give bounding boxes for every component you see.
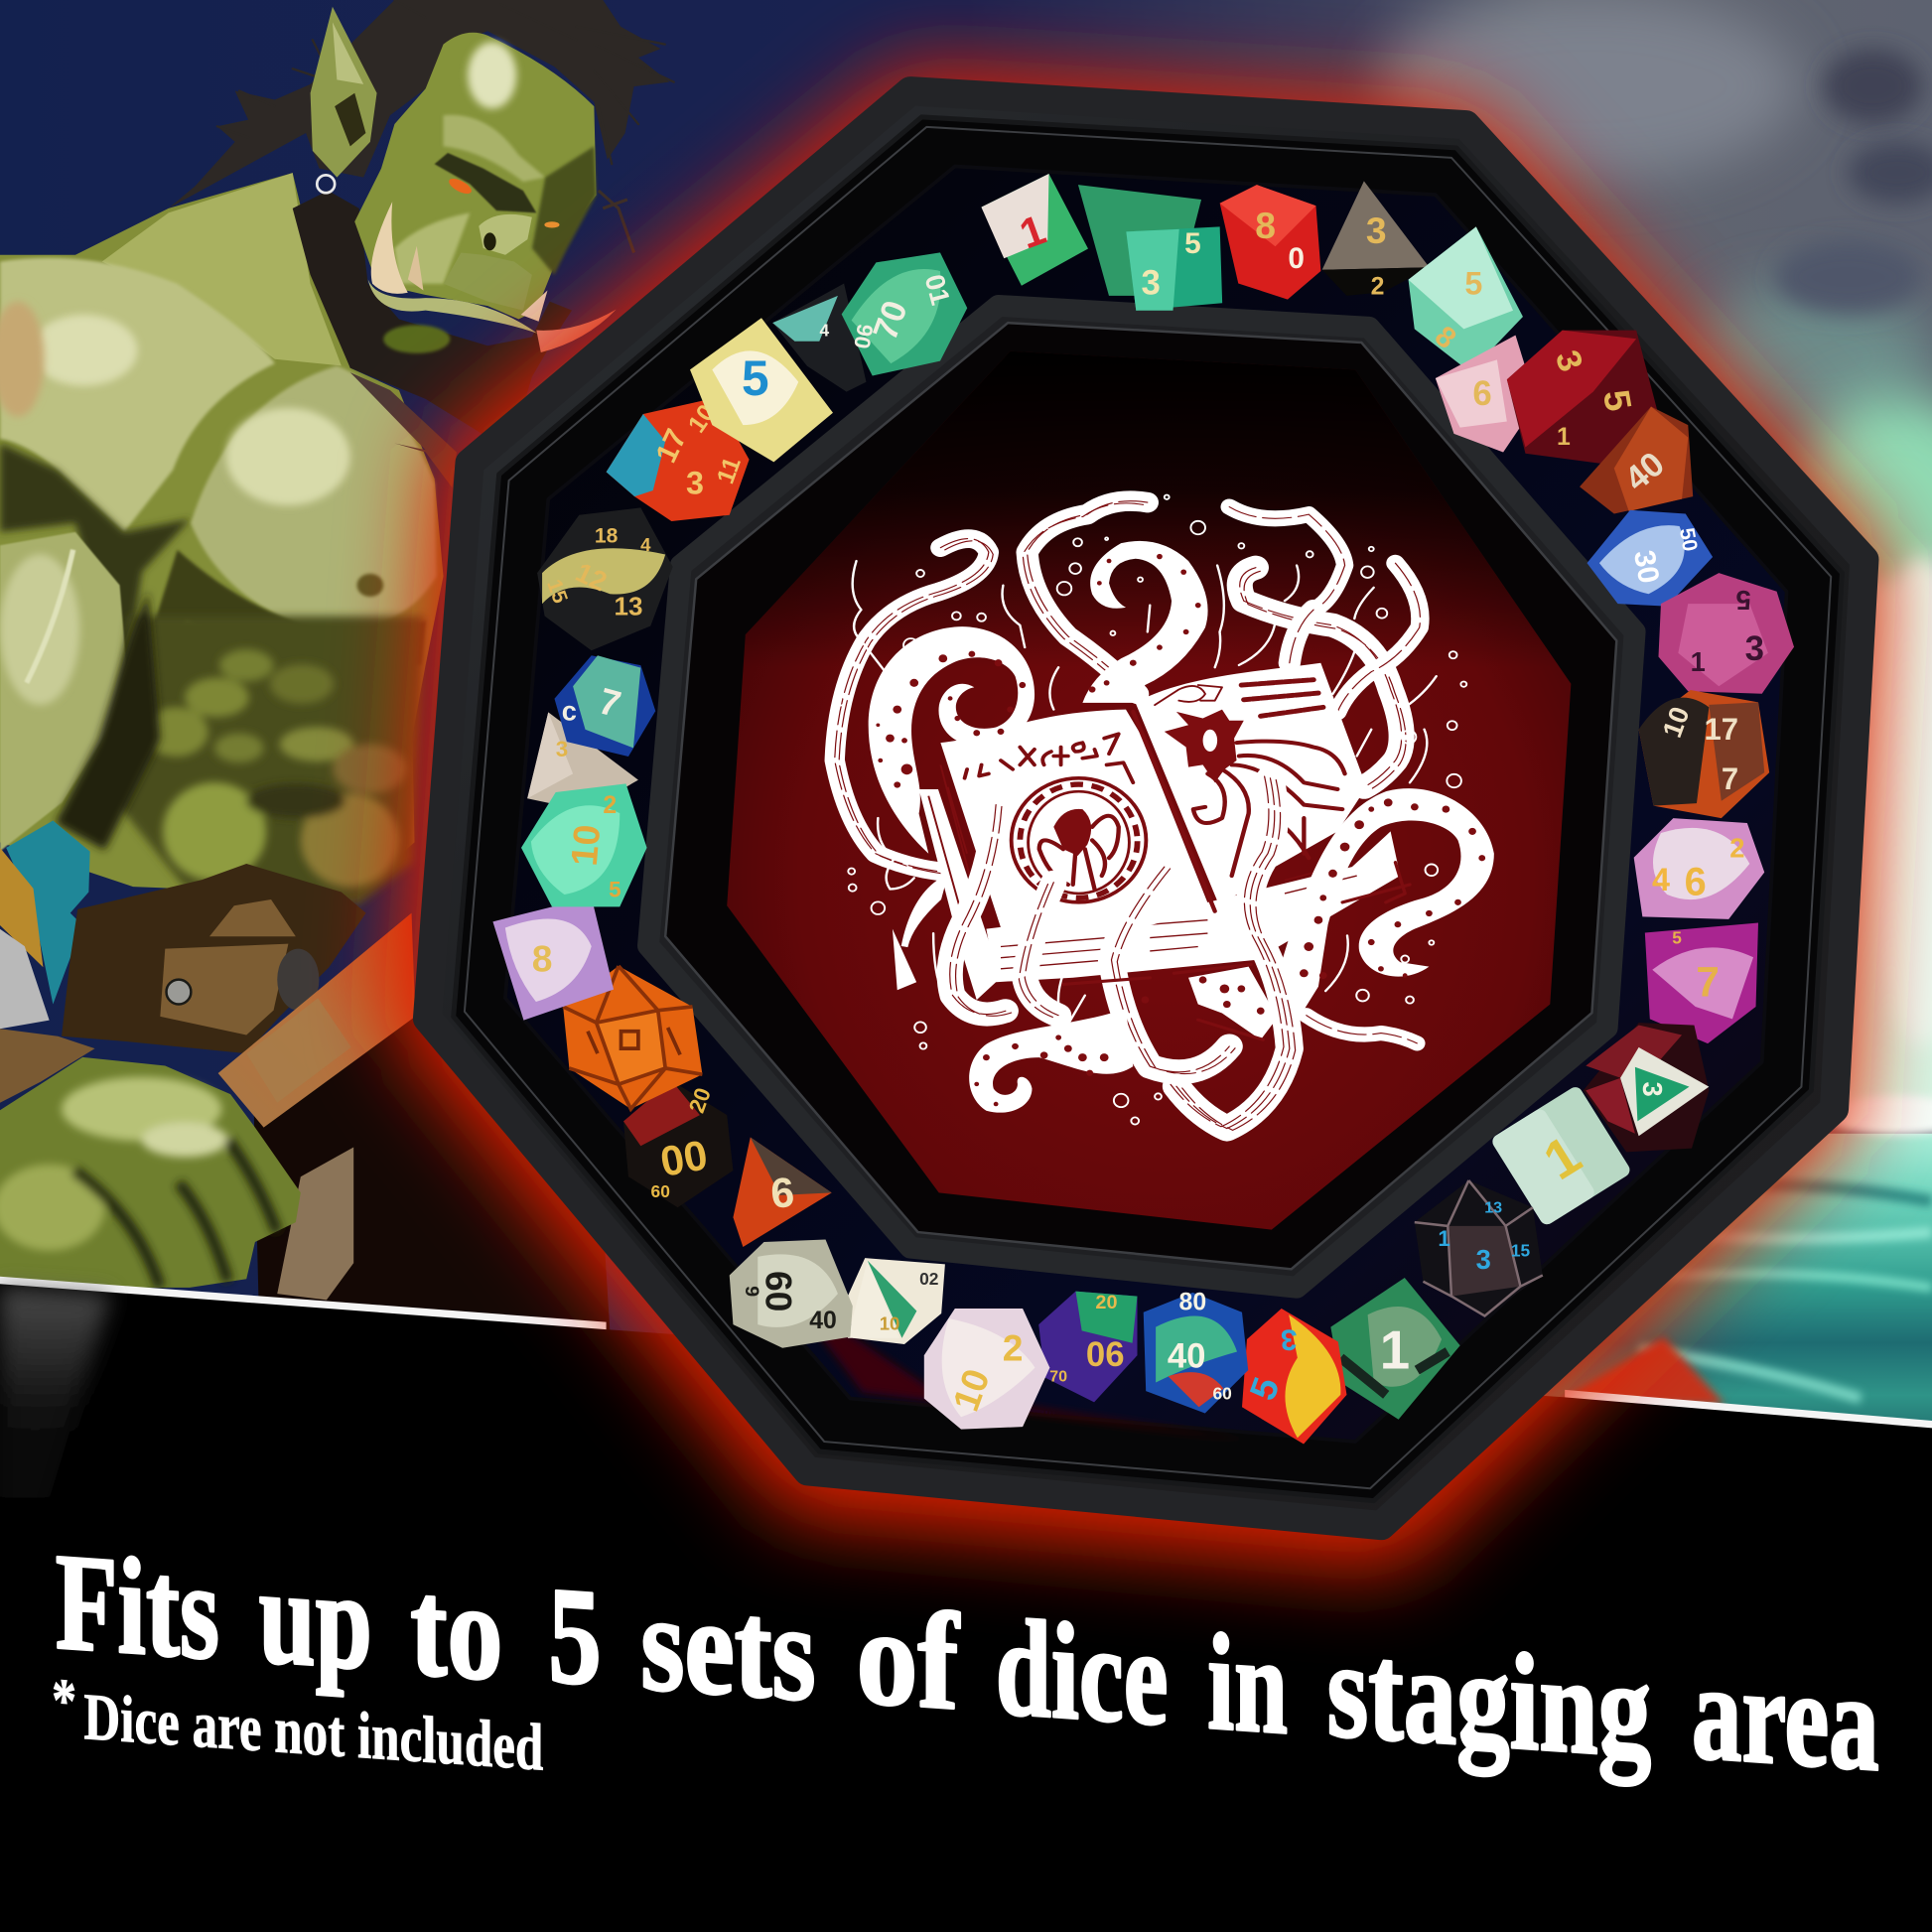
die: pale mint d6 xyxy=(1490,1084,1632,1227)
die: grey d4: 2 xyxy=(1371,274,1384,301)
orc: nipple xyxy=(356,574,383,597)
die: pink: 6 xyxy=(1472,375,1492,413)
tentacle top centre xyxy=(1082,541,1208,703)
die: small white green d4: 10 xyxy=(880,1312,899,1333)
orc: beard xyxy=(293,191,572,435)
die: red yellow: 3 xyxy=(1281,1323,1297,1356)
orc: upper arm xyxy=(0,532,128,851)
die: red d8: 0 xyxy=(1288,242,1305,275)
die: purple white d6 xyxy=(492,897,614,1021)
sea xyxy=(1540,1134,1932,1442)
orc: small tusk xyxy=(408,246,423,290)
black lower band xyxy=(0,1284,1932,1932)
orc: arm highlight xyxy=(0,554,79,705)
book page lines xyxy=(1001,863,1357,969)
headline: dice xyxy=(996,1590,1169,1755)
die: purple xyxy=(1038,1292,1138,1402)
die: black yellow d20: 15 xyxy=(542,577,572,607)
orc: chest strap xyxy=(350,372,457,487)
die: teal black xyxy=(772,283,866,392)
die: red black d4 xyxy=(733,1138,832,1247)
orc: belt upper panel xyxy=(209,899,296,936)
orc: inner ear xyxy=(335,93,365,146)
die: black yellow d20: 4 xyxy=(640,534,651,555)
orc: silver blade xyxy=(0,929,50,1029)
die: black blue: 1 xyxy=(1438,1226,1450,1251)
die: orange blue d20: 17 xyxy=(649,424,693,468)
headline: to xyxy=(410,1552,502,1711)
orc: shoulder shadow xyxy=(0,444,191,692)
orc: muzzle xyxy=(444,253,532,311)
die: orange dark xyxy=(1639,690,1769,818)
die: blue white: 30 xyxy=(1627,548,1665,586)
tentacle and book artwork xyxy=(835,494,1494,1130)
die: blue green swirl: 60 xyxy=(1212,1384,1232,1404)
orc: shoulder highlight xyxy=(31,315,137,385)
die: pale grey d10 xyxy=(730,1240,853,1348)
sigil ring glyphs xyxy=(1020,784,1138,897)
die: green d10: 70 xyxy=(867,296,915,345)
die: dark red black: 20 xyxy=(684,1084,716,1116)
orc: body silhouette xyxy=(0,173,444,896)
die: mint teal d10: 10 xyxy=(563,823,608,868)
orc: gold blade xyxy=(0,848,43,967)
die: purple: 20 xyxy=(1095,1292,1118,1313)
die: blue green d4: c xyxy=(562,696,577,727)
die: mint teal d10: 2 xyxy=(603,792,617,819)
orc: chin xyxy=(383,325,450,353)
inner tower outer wall xyxy=(648,306,1635,1288)
die: pale grey d10: 40 xyxy=(809,1308,837,1334)
die: black yellow d20: 13 xyxy=(614,592,642,621)
die: yellow white d6 xyxy=(690,318,833,462)
die: orange blue d20 xyxy=(607,398,750,521)
creature tendrils xyxy=(1193,742,1345,876)
die: blue green d4: 7 xyxy=(595,679,625,725)
die: blue green d4 xyxy=(554,655,655,757)
kelp ribbons behind book xyxy=(835,501,1420,1043)
orc: dark gap beside arm xyxy=(56,592,160,850)
orc: pink strap behind jaw xyxy=(536,310,617,352)
orc: hair strands xyxy=(217,0,674,164)
die: red yellow xyxy=(1241,1309,1346,1445)
cthulhu tentacles xyxy=(1039,816,1119,889)
white slanted divider lines xyxy=(0,1277,1932,1430)
velvet sliver lower staging area xyxy=(788,1294,1257,1442)
die: pink white d10: 2 xyxy=(1729,832,1745,863)
orc: eye socket xyxy=(435,153,536,212)
orc: lower tusk xyxy=(521,290,547,322)
die: pink xyxy=(1436,336,1537,452)
tray outer wall xyxy=(428,91,1864,1526)
die: red d8 xyxy=(1220,185,1320,300)
die: green white d8: 1 xyxy=(1014,206,1051,257)
book right page xyxy=(1136,663,1366,906)
die: green d6: 1 xyxy=(1380,1320,1410,1381)
background: navy sky and storm xyxy=(0,0,1932,1442)
orc: axe handle xyxy=(218,913,415,1128)
book left page xyxy=(940,710,1210,942)
headline: in xyxy=(1207,1605,1288,1763)
orc: pectoral highlight xyxy=(226,408,350,505)
orc: face xyxy=(354,33,597,320)
horizon glow xyxy=(1824,1095,1932,1135)
die: magenta d8: 7 xyxy=(1696,959,1720,1006)
die: magenta d12: 1 xyxy=(1691,646,1706,677)
die: mint teal d10: 5 xyxy=(609,878,621,902)
die: mint d10: 8 xyxy=(1429,320,1462,355)
orc: lower dark area xyxy=(252,1011,610,1330)
orc: abdomen xyxy=(104,617,425,905)
orc: big tusk xyxy=(371,202,408,294)
orc: belt stud xyxy=(167,980,191,1004)
die: blue white: 50 xyxy=(1675,526,1702,553)
headline xyxy=(56,1525,1879,1801)
die: magenta d12: 3 xyxy=(1745,630,1764,668)
die: orange dark: 7 xyxy=(1722,761,1738,796)
orc: shoulder deltoid xyxy=(0,258,275,532)
tentacle right big xyxy=(1283,788,1494,1018)
die: white pink d10: 2 xyxy=(1003,1327,1024,1369)
orc: cheek xyxy=(394,212,470,284)
orc: neck and trapezius xyxy=(102,173,342,365)
dice tray xyxy=(428,91,1864,1526)
die: black yellow d20: 18 xyxy=(595,524,619,547)
die: mint d10: 5 xyxy=(1464,265,1482,301)
die: pale grey d8: 3 xyxy=(556,737,568,761)
left page rune marks xyxy=(965,734,1133,782)
die: blue white xyxy=(1587,510,1713,607)
sea wave streaks xyxy=(1601,1184,1932,1399)
grey fade on left of black band xyxy=(0,1287,111,1540)
die: grey d4: 3 xyxy=(1366,209,1387,251)
right page script lines xyxy=(1241,680,1323,716)
die: orange blue d20: 3 xyxy=(686,465,704,501)
die: brown red xyxy=(1580,407,1693,514)
tentacle lower centre xyxy=(1188,967,1278,1039)
die: dark red black xyxy=(623,1080,733,1207)
die: green d10: 01 xyxy=(919,271,956,308)
die: black blue: 15 xyxy=(1511,1241,1530,1261)
orc: brow highlight xyxy=(444,115,545,182)
die: pale grey d10: 60 xyxy=(758,1271,799,1311)
die: red d8: 8 xyxy=(1255,205,1276,246)
die: teal d6: 5 xyxy=(1184,227,1201,260)
headline: sets xyxy=(640,1566,816,1730)
die: dark red glitter: 5 xyxy=(1595,387,1640,414)
creature eye xyxy=(1203,730,1217,752)
die: orange d20 xyxy=(563,966,702,1109)
orc: pec underside shadow xyxy=(133,550,426,692)
die: brown red: 40 xyxy=(1618,445,1672,498)
die: orange dark: 17 xyxy=(1705,712,1738,747)
orc: belt fur tuft xyxy=(277,949,319,1011)
die: orange blue d20: 11 xyxy=(713,454,747,487)
red gap details xyxy=(1063,863,1410,1039)
orc: left eye xyxy=(447,176,474,197)
velvet playing surface xyxy=(727,351,1571,1230)
die: pale grey d8 xyxy=(527,712,638,811)
die: blue green swirl: 40 xyxy=(1168,1337,1205,1375)
die: translucent green xyxy=(1078,185,1201,296)
die: green d6 xyxy=(1330,1278,1460,1420)
die: red yellow: 5 xyxy=(1241,1372,1288,1406)
die: purple white d6: 8 xyxy=(532,938,552,980)
die: black blue: 13 xyxy=(1484,1198,1502,1216)
orc: belt xyxy=(62,864,366,1053)
die: pale mint d6: 1 xyxy=(1534,1124,1591,1191)
eye creature xyxy=(1165,710,1244,782)
die: green d10 xyxy=(842,252,967,376)
right page top glyph xyxy=(1155,685,1222,705)
orc: shoulder scar xyxy=(0,302,45,417)
die: pink white d10: 4 xyxy=(1652,862,1670,897)
orc: ear highlight xyxy=(333,22,363,84)
suckers xyxy=(876,554,1485,1106)
orc: teal backdrop gap xyxy=(6,821,90,1004)
die: metal red d4: 3 xyxy=(1637,1082,1668,1097)
die: black blue xyxy=(1415,1180,1543,1315)
die: teal d6 xyxy=(1126,226,1222,311)
orc: abdomen muscle blobs xyxy=(144,649,407,888)
orc: arm tendon xyxy=(27,550,73,683)
die: grey d4 xyxy=(1322,181,1430,301)
die: magenta d8: 5 xyxy=(1672,927,1682,947)
orc: hand highlights xyxy=(0,1077,277,1288)
orc: ear xyxy=(311,7,377,178)
kelp over the book xyxy=(950,805,1235,1074)
orc: cloth wrap xyxy=(0,1029,95,1103)
curved ribbon lower left xyxy=(904,881,943,947)
orc: pectoral xyxy=(191,365,437,630)
die: black yellow d20 xyxy=(537,507,673,650)
orc: lower lip xyxy=(368,279,537,334)
book spine xyxy=(1133,712,1215,911)
kelp mid ribbon xyxy=(1171,776,1296,1130)
die: small white green d4: 02 xyxy=(919,1269,938,1289)
book page stack xyxy=(986,831,1400,982)
die: magenta d12 xyxy=(1658,573,1794,694)
die: black blue: 3 xyxy=(1476,1244,1491,1275)
tray rim recess xyxy=(454,117,1842,1501)
die: blue green swirl: 80 xyxy=(1179,1289,1206,1315)
dice ring xyxy=(492,169,1794,1445)
die: yellow white d6: 5 xyxy=(742,350,769,406)
die: orange dark: 10 xyxy=(1656,703,1696,742)
orc: upper torso in head-crop coordinates xyxy=(0,0,674,896)
inner tower lip xyxy=(665,323,1616,1269)
orc warrior figure xyxy=(0,0,674,1330)
quill shape lower left xyxy=(893,929,916,990)
orc: earring xyxy=(317,175,335,193)
sigil ring inner xyxy=(1029,791,1129,894)
die: green d10: 06 xyxy=(850,322,878,350)
die: teal d6: 3 xyxy=(1141,264,1161,302)
cthulhu head xyxy=(1053,809,1091,856)
book left side edge xyxy=(919,789,1001,1000)
headline: Fits xyxy=(56,1525,219,1690)
die: red black d4: 9 xyxy=(768,1169,796,1217)
die: purple: 06 xyxy=(1086,1336,1125,1374)
die: orange blue d20: 10 xyxy=(683,400,721,438)
die: magenta d8 xyxy=(1645,923,1758,1043)
tray staging floor xyxy=(505,167,1787,1442)
tentacle lower left xyxy=(969,1009,1133,1113)
die: dark red glitter xyxy=(1507,331,1657,466)
red glow by sea xyxy=(1553,1337,1725,1405)
die: green white d8 xyxy=(978,169,1093,291)
orc: hand xyxy=(0,1057,301,1288)
die: mint teal d10 xyxy=(521,783,647,906)
die: dark red glitter: 1 xyxy=(1557,424,1571,451)
orc: belt lit panel xyxy=(160,944,288,1035)
die: mint d10 xyxy=(1409,226,1523,372)
orc: right eye xyxy=(544,221,560,228)
orc: right side shadow xyxy=(532,146,597,275)
die: pink white d10 xyxy=(1634,818,1764,919)
headline: 5 xyxy=(548,1559,602,1715)
footnote: * xyxy=(52,1667,76,1735)
thin squiggles xyxy=(853,561,1437,1025)
headline: staging xyxy=(1327,1613,1651,1788)
die: dark red black: 60 xyxy=(651,1181,670,1201)
orc: forehead highlight xyxy=(468,42,516,108)
die: teal black: 4 xyxy=(819,321,829,341)
die: black yellow d20: 12 xyxy=(571,556,612,597)
orc: fur skirt xyxy=(277,1147,353,1300)
die: magenta d12: 5 xyxy=(1736,585,1751,616)
die: pale grey d10: 9 xyxy=(741,1286,762,1297)
die: white pink d10 xyxy=(924,1309,1049,1430)
footnote: Dice are not included xyxy=(83,1679,543,1785)
tentacle left big xyxy=(869,626,1035,854)
die: small white green d4 xyxy=(848,1258,945,1344)
headline: up xyxy=(259,1539,372,1700)
orc: hair back mass xyxy=(169,0,669,208)
orc: handle binding xyxy=(246,998,351,1103)
orc: nostril xyxy=(483,232,496,250)
bubbles xyxy=(836,494,1466,1125)
die: dark red black: 00 xyxy=(657,1131,711,1185)
footnote xyxy=(52,1667,543,1785)
die: dark red glitter: 3 xyxy=(1548,345,1589,376)
orc: nose xyxy=(479,214,532,255)
die: pink white d10: 6 xyxy=(1685,861,1707,904)
die: metal red d4 xyxy=(1584,1023,1709,1152)
red glow around tray xyxy=(394,68,1885,1571)
die: blue green swirl xyxy=(1144,1289,1248,1414)
headline: of xyxy=(857,1580,960,1739)
book cover line xyxy=(928,764,977,933)
top shadow over velvet xyxy=(727,351,1571,1230)
sigil ring xyxy=(1012,778,1146,902)
die: white pink d10: 10 xyxy=(944,1363,998,1417)
tray rim line xyxy=(465,127,1831,1488)
die: purple: 70 xyxy=(1049,1367,1067,1385)
orc: hair trinket xyxy=(599,191,634,253)
